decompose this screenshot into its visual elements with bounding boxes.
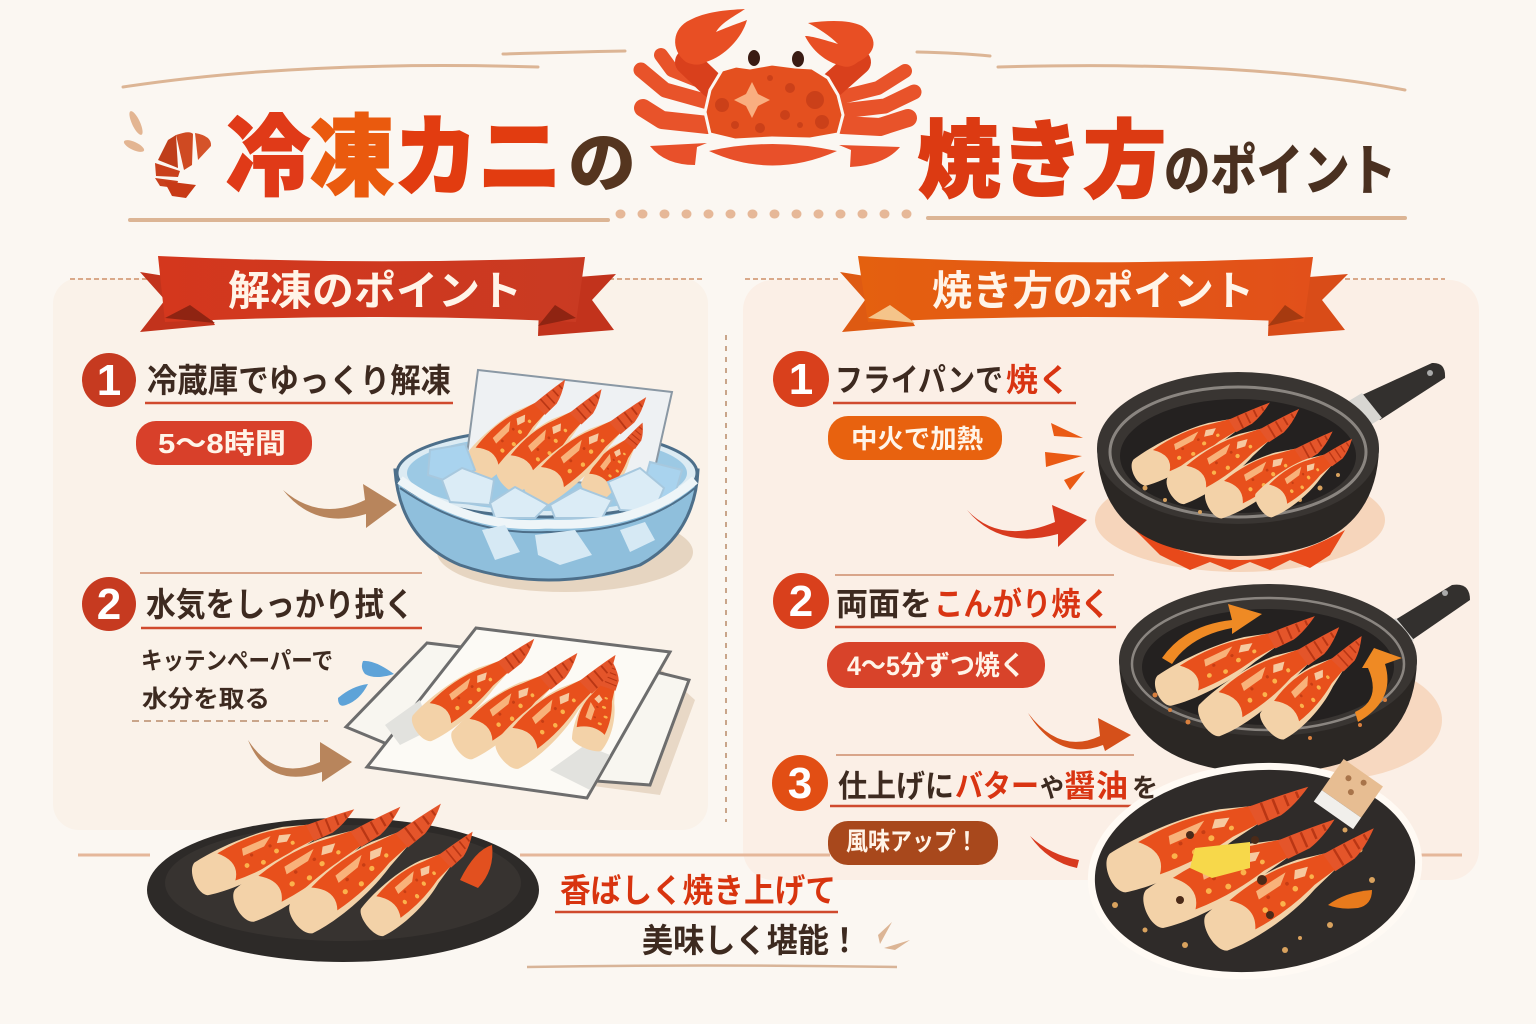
illustration: grilled crab plate — [147, 791, 539, 962]
step 3: butter and soy sauce: 3 — [788, 759, 812, 808]
step 2: wipe moisture: 水気をしっかり拭く — [146, 586, 414, 623]
arrow: to pan one — [967, 505, 1087, 547]
closing message — [527, 872, 910, 967]
illustration: bowl of ice with crab legs — [395, 370, 698, 592]
closing message: 美味しく堪能！ — [642, 922, 860, 959]
step 3: butter and soy sauce: 仕上げに — [838, 769, 954, 804]
header decorative lines — [123, 51, 1405, 220]
step 1: frying pan — [773, 351, 1076, 407]
step 2: wipe moisture: 2 — [97, 580, 121, 629]
step 2: brown both sides: 2 — [789, 577, 813, 626]
pill: 5 to 8 hours: 5〜8時間 — [158, 428, 286, 459]
banner: grilling points — [840, 256, 1348, 336]
title: how to grill: 焼き方 — [918, 114, 1166, 208]
text: kitchen paper note — [132, 648, 333, 721]
closing message: 香ばしく焼き上げて — [560, 872, 836, 909]
icon: crab — [641, 9, 914, 167]
panel: grilling background — [743, 280, 1479, 880]
banner: grilling points: 焼き方のポイント — [932, 268, 1254, 314]
pill: medium heat — [828, 416, 1002, 460]
arrow: to pan two — [1028, 713, 1131, 751]
banner: thawing points: 解凍のポイント — [228, 268, 522, 314]
arrow: to paper towels — [248, 740, 352, 782]
text: kitchen paper note: 水分を取る — [142, 686, 270, 713]
pill: four to five minutes: 4〜5分ずつ焼く — [847, 651, 1025, 681]
illustration: pan one — [1095, 363, 1445, 572]
step 2: wipe moisture — [82, 573, 422, 631]
icon: shrimp — [122, 110, 211, 198]
banner: thawing points — [140, 256, 616, 336]
step 1: refrigerator thaw: 1 — [97, 356, 121, 405]
pill: flavor up: 風味アップ！ — [846, 828, 978, 856]
step 1: refrigerator thaw — [82, 353, 453, 407]
step 3: butter and soy sauce: や — [1040, 773, 1064, 803]
illustration: crab legs on paper towels — [346, 628, 695, 798]
step 2: brown both sides: こんがり焼く — [934, 586, 1110, 622]
pill: 5 to 8 hours — [136, 421, 312, 465]
title: frozen crab: 冷凍カニ — [226, 108, 562, 207]
step 1: frying pan: フライパンで — [835, 362, 1003, 398]
icon: seasoning shaker — [1314, 759, 1383, 829]
step 3: butter and soy sauce: バター — [955, 769, 1039, 804]
illustration: pan two — [1119, 584, 1470, 780]
text: kitchen paper note: キッテンペーパーで — [141, 648, 333, 675]
panel: thawing background — [53, 278, 708, 830]
step 1: frying pan: 1 — [789, 355, 813, 404]
step 1: refrigerator thaw: 冷蔵庫でゆっくり解凍 — [147, 362, 451, 399]
title: frozen crab: の — [568, 126, 636, 200]
step 3: butter and soy sauce: 醤油 — [1064, 769, 1128, 804]
text: step 3 trailing particle: を — [1132, 773, 1158, 803]
step 2: brown both sides — [773, 573, 1116, 629]
icon: water drops — [338, 661, 394, 706]
icon: flip arrows — [1162, 604, 1402, 722]
title: how to grill — [918, 114, 1396, 208]
pill: four to five minutes — [827, 642, 1045, 688]
illustration: finished pan with butter — [1083, 753, 1427, 989]
pill: flavor up — [828, 821, 998, 865]
step 3: butter and soy sauce — [772, 755, 1157, 811]
icon: heat sparks — [1045, 423, 1085, 490]
arrow: to bowl — [283, 484, 397, 528]
arrow: to finished pan — [1030, 836, 1079, 868]
pill: medium heat: 中火で加熱 — [851, 424, 983, 454]
step 2: brown both sides: 両面を — [836, 586, 932, 622]
title: how to grill: のポイント — [1164, 140, 1396, 202]
step 1: frying pan: 焼く — [1006, 362, 1070, 398]
